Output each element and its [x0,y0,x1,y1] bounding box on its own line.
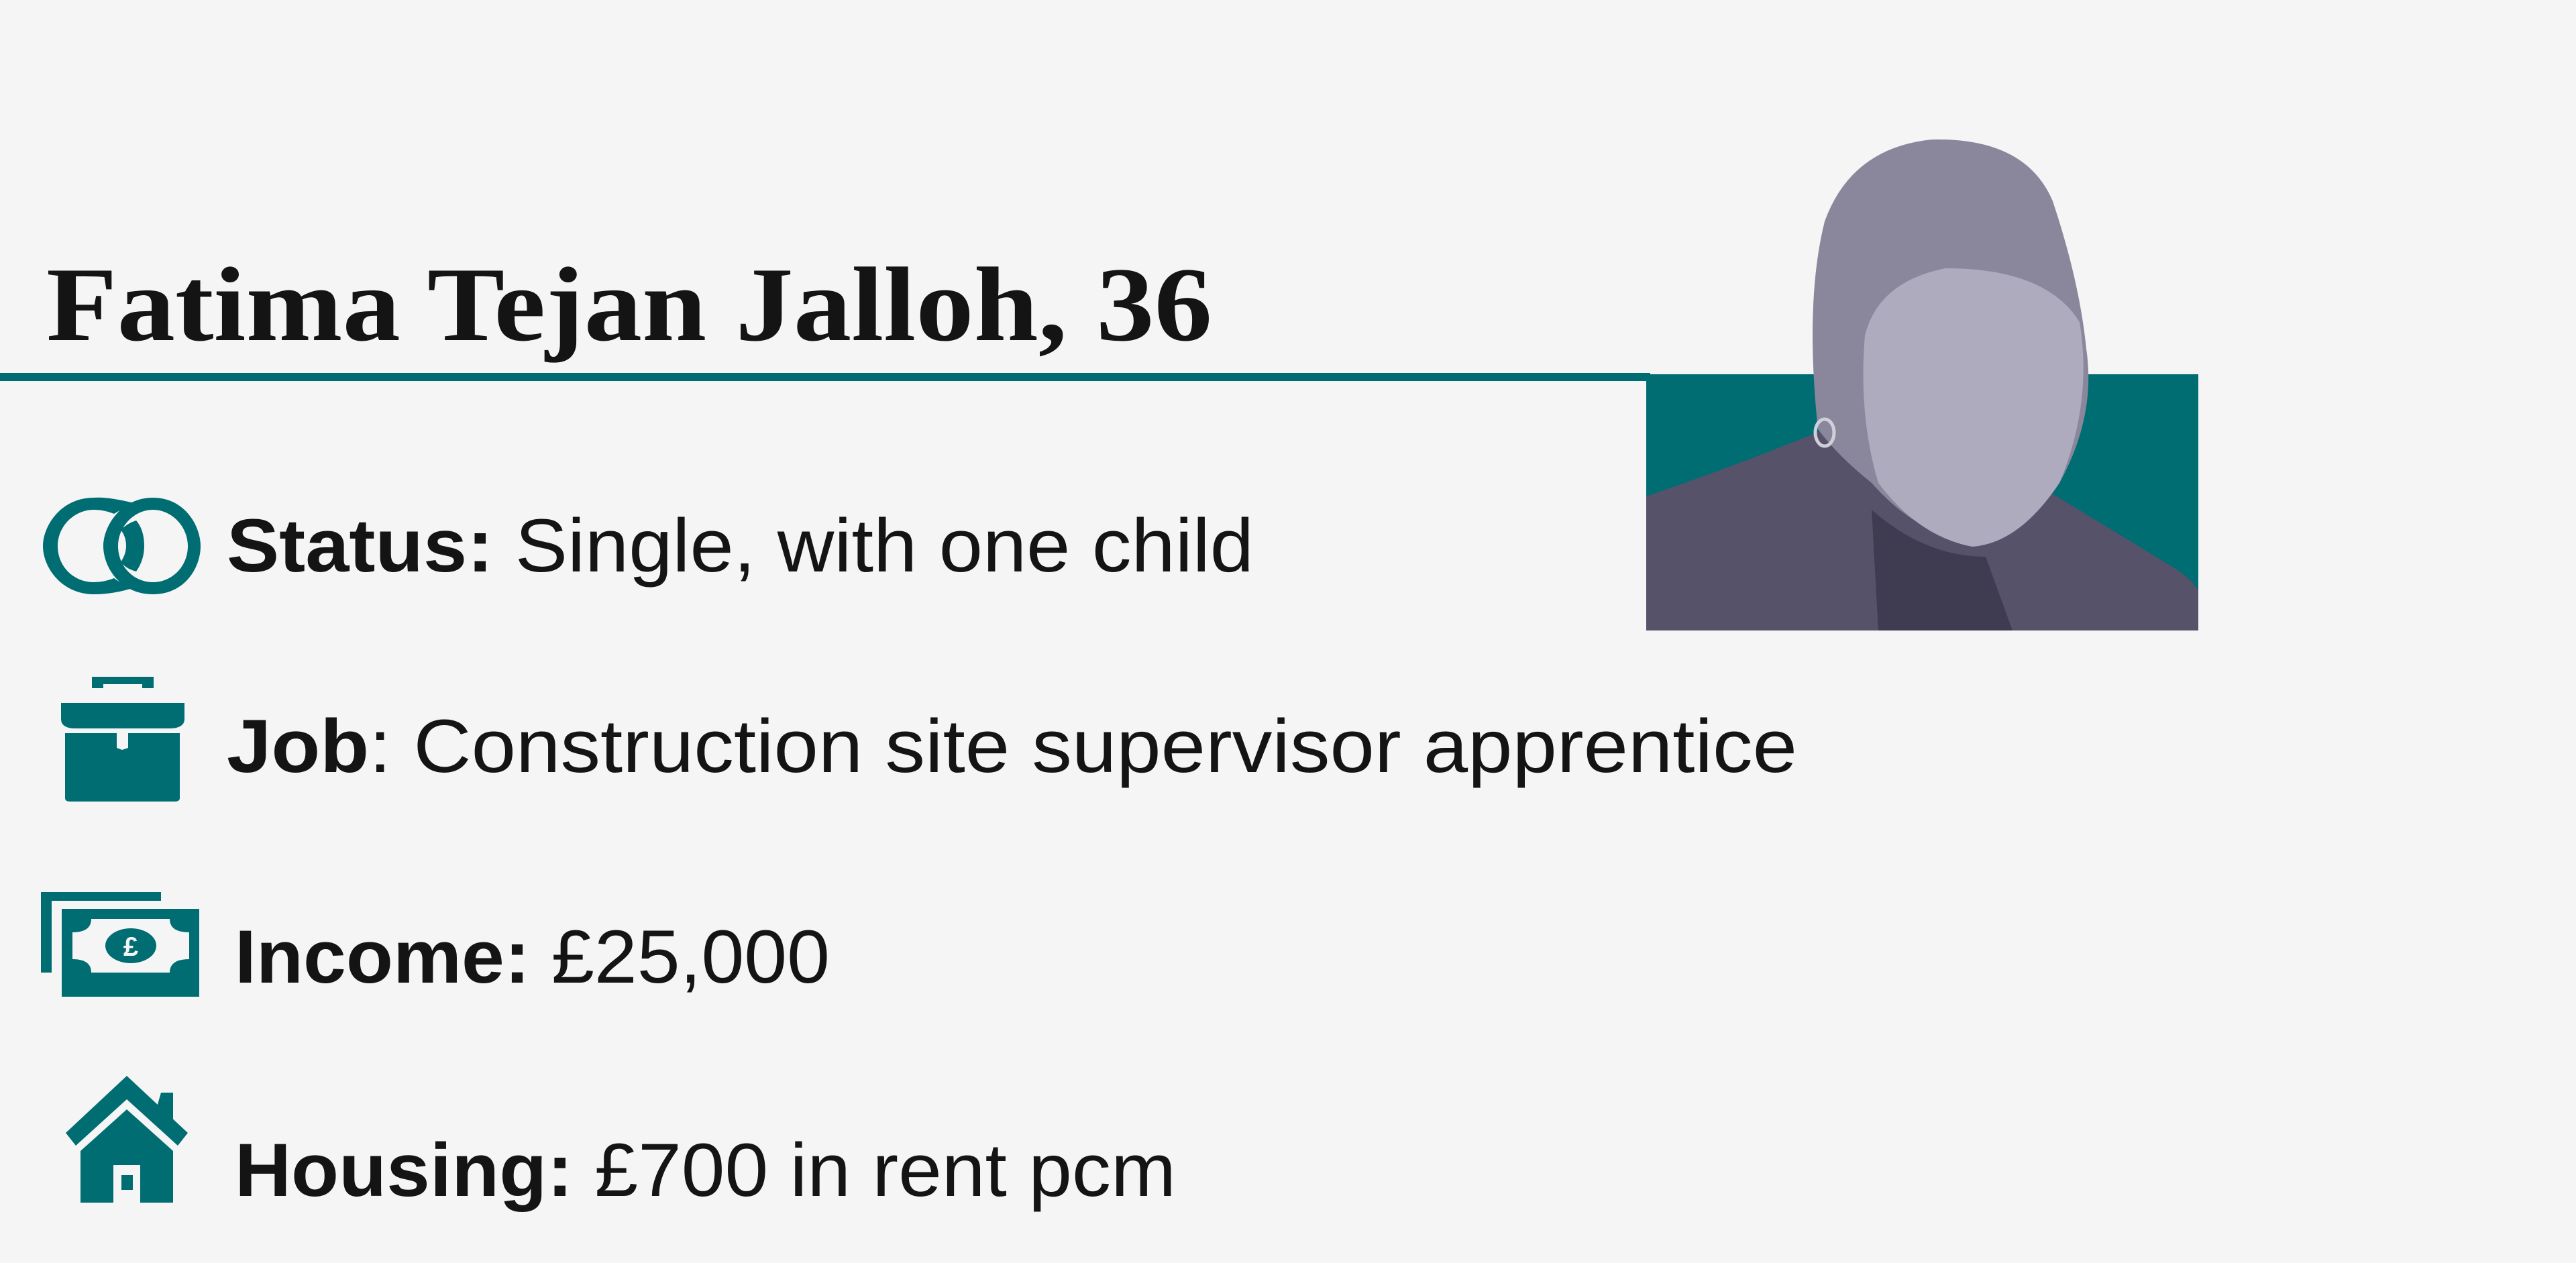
text: income: Income: £25,000 [235,915,830,999]
icon: briefcase [61,677,184,802]
teal underline [0,373,1650,381]
text: housing: Housing: £700 in rent pcm [235,1128,1176,1212]
icon: house [66,1076,188,1203]
title: Fatima Tejan Jalloh, 36 [46,246,1212,364]
photo: portrait [1646,140,2198,630]
photo backdrop [1646,374,2198,630]
text: job: Job: Construction site supervisor apprentice [227,704,1797,788]
icon: money: £ [123,932,138,962]
icon: money [41,892,199,997]
icon: rings [43,498,201,594]
text: status: Status: Single, with one child [227,504,1254,588]
